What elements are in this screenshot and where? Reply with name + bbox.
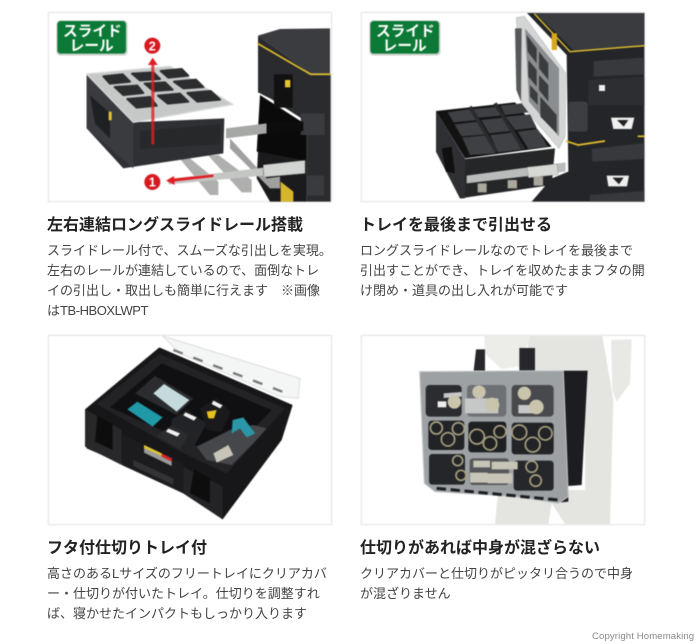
text: pull tray fully: け閉め・道具の出し入れが可能です [360, 283, 568, 298]
tray body [85, 347, 293, 519]
copyright: Copyright Homemaking [592, 631, 694, 642]
stacked case [257, 28, 331, 202]
person in work clothes [484, 336, 632, 524]
tools in tray [127, 376, 267, 465]
panel: carrying case illustration [360, 334, 646, 526]
text: long slide rail: 左右のレールが連結しているので、面倒なトレ [47, 263, 319, 278]
text: pull tray fully: 引出すことができ、トレイを収めたままフタの開 [360, 263, 645, 278]
arrow 1 with number: 1 [149, 176, 156, 190]
lid [515, 16, 566, 148]
text: dividers keep contents apart [360, 566, 633, 601]
heading: tray with lid: フタ付仕切りトレイ付 [47, 540, 207, 557]
heading: dividers keep contents apart: 仕切りがあれば中身が混ざらない [360, 540, 600, 557]
icon: slide rail badge: レール [383, 35, 427, 56]
text: tray with lid: ー・仕切りが付いたトレイ。仕切りを調整すれ [47, 586, 320, 601]
arrow 1 with number [144, 174, 213, 190]
text: long slide rail [47, 243, 332, 318]
clear lid [163, 336, 300, 398]
handle [474, 349, 534, 371]
panel: pull-out tray illustration [360, 12, 646, 203]
text: dividers keep contents apart: クリアカバーと仕切りがピッタリ合うので中身 [360, 566, 633, 581]
arrow 2 with number [144, 38, 160, 144]
heading: pull tray fully: トレイを最後まで引出せる [360, 217, 552, 234]
slide rails [168, 122, 305, 195]
icon: slide rail badge: スライド [63, 20, 122, 41]
contents: bushings and rings [430, 385, 552, 486]
text: dividers keep contents apart: が混ざりません [360, 586, 451, 601]
text: tray with lid: 高さのあるLサイズのフリートレイにクリアカバ [47, 566, 327, 581]
text: long slide rail: イの引出し・取出しも簡単に行えます ※画像 [47, 283, 320, 298]
arrow 2 with number: 2 [149, 39, 156, 53]
text: tray with lid [47, 566, 327, 621]
heading: long slide rail: 左右連結ロングスライドレール搭載 [47, 217, 303, 234]
text: tray with lid: ば、寝かせたインパクトもしっかり入ります [47, 606, 307, 621]
text: long slide rail: スライドレール付で、スムーズな引出しを実現。 [47, 243, 332, 258]
stacked case [527, 13, 644, 202]
icon: slide rail badge: スライド [376, 20, 435, 41]
drawer tray [87, 66, 233, 168]
icon: slide rail badge [56, 20, 128, 56]
drawer [436, 102, 555, 198]
panel: tray with lid illustration [48, 334, 332, 526]
text: pull tray fully: ロングスライドレールなのでトレイを最後まで [360, 243, 633, 258]
panel: slide rail illustration [48, 12, 332, 203]
icon: slide rail badge [369, 20, 441, 56]
text: pull tray fully [360, 243, 645, 298]
clear case front [420, 371, 568, 503]
slide rail [467, 162, 566, 192]
icon: slide rail badge: レール [70, 35, 114, 56]
case side [558, 371, 588, 503]
text: long slide rail: はTB-HBOXLWPT [47, 303, 148, 318]
